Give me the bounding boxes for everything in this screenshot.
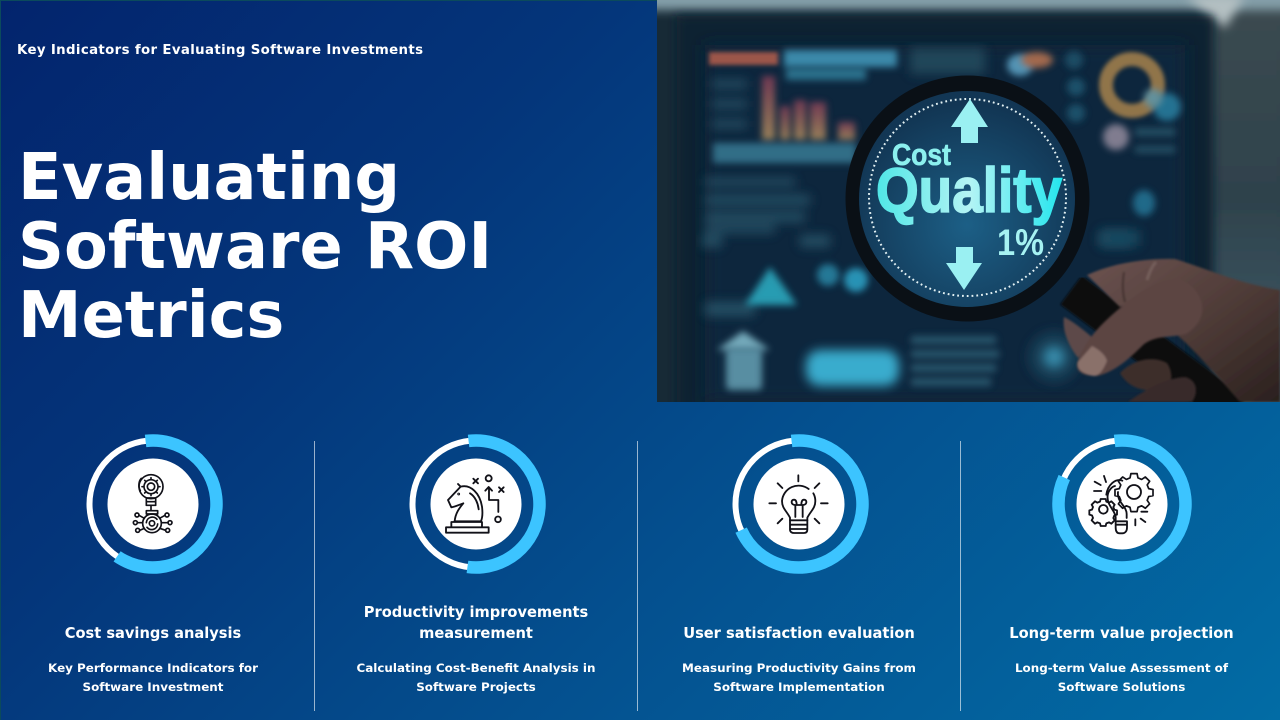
panel: long-term value: [1009, 434, 1234, 694]
description: [1015, 660, 1228, 694]
hand holding the magnifier: [1064, 259, 1280, 402]
ring chart with icon: gears in bulb: [1052, 434, 1192, 574]
blurred dashboard: [702, 48, 1181, 390]
description: [682, 660, 916, 694]
description: Calculating Cost-Benefit Analysis in: [357, 660, 595, 674]
lens text: percentage: 1%: [997, 222, 1044, 263]
divider: [314, 441, 315, 711]
description: [48, 660, 258, 694]
heading: User satisfaction evaluation: [683, 625, 915, 642]
description: Software Projects: [416, 680, 536, 694]
description: [357, 660, 595, 694]
description: Software Implementation: [713, 680, 885, 694]
divider: [637, 441, 638, 711]
ring chart with icon: bulb and circuit: [86, 434, 223, 574]
heading: Productivity improvements: [364, 604, 588, 621]
icon: magnifying glass lens: [846, 76, 1090, 322]
icon: down arrow: [946, 247, 982, 290]
description: Measuring Productivity Gains from: [682, 660, 916, 674]
kicker heading: Key Indicators for Evaluating Software Investments: [17, 42, 423, 58]
lens text: Quality: Quality: [876, 156, 1062, 226]
ring chart with icon: light bulb: [732, 434, 869, 574]
heading: Long-term value projection: [1009, 625, 1234, 642]
heading: [364, 604, 588, 642]
lens text: Cost: Cost: [892, 137, 951, 172]
title: Evaluating: [18, 141, 400, 215]
panel: cost savings: [48, 434, 258, 694]
description: Key Performance Indicators for: [48, 660, 258, 674]
heading: Cost savings analysis: [65, 625, 241, 642]
title: [18, 141, 492, 353]
description: Software Investment: [83, 680, 223, 694]
photo: magnifying glass over blurred dashboard: [657, 0, 1280, 402]
description: Long-term Value Assessment of: [1015, 660, 1228, 674]
title: Software ROI: [18, 210, 492, 284]
photo backdrop: [640, 0, 1280, 416]
title: Metrics: [18, 279, 284, 353]
divider: [960, 441, 961, 711]
description: Software Solutions: [1058, 680, 1185, 694]
icon: magnifying glass handle: [1071, 290, 1235, 412]
heading: measurement: [419, 625, 533, 642]
icon: up arrow: [951, 99, 988, 143]
ring chart with icon: chess knight strategy: [410, 434, 546, 574]
panel: productivity: [357, 434, 595, 694]
panel: user satisfaction: [682, 434, 916, 694]
